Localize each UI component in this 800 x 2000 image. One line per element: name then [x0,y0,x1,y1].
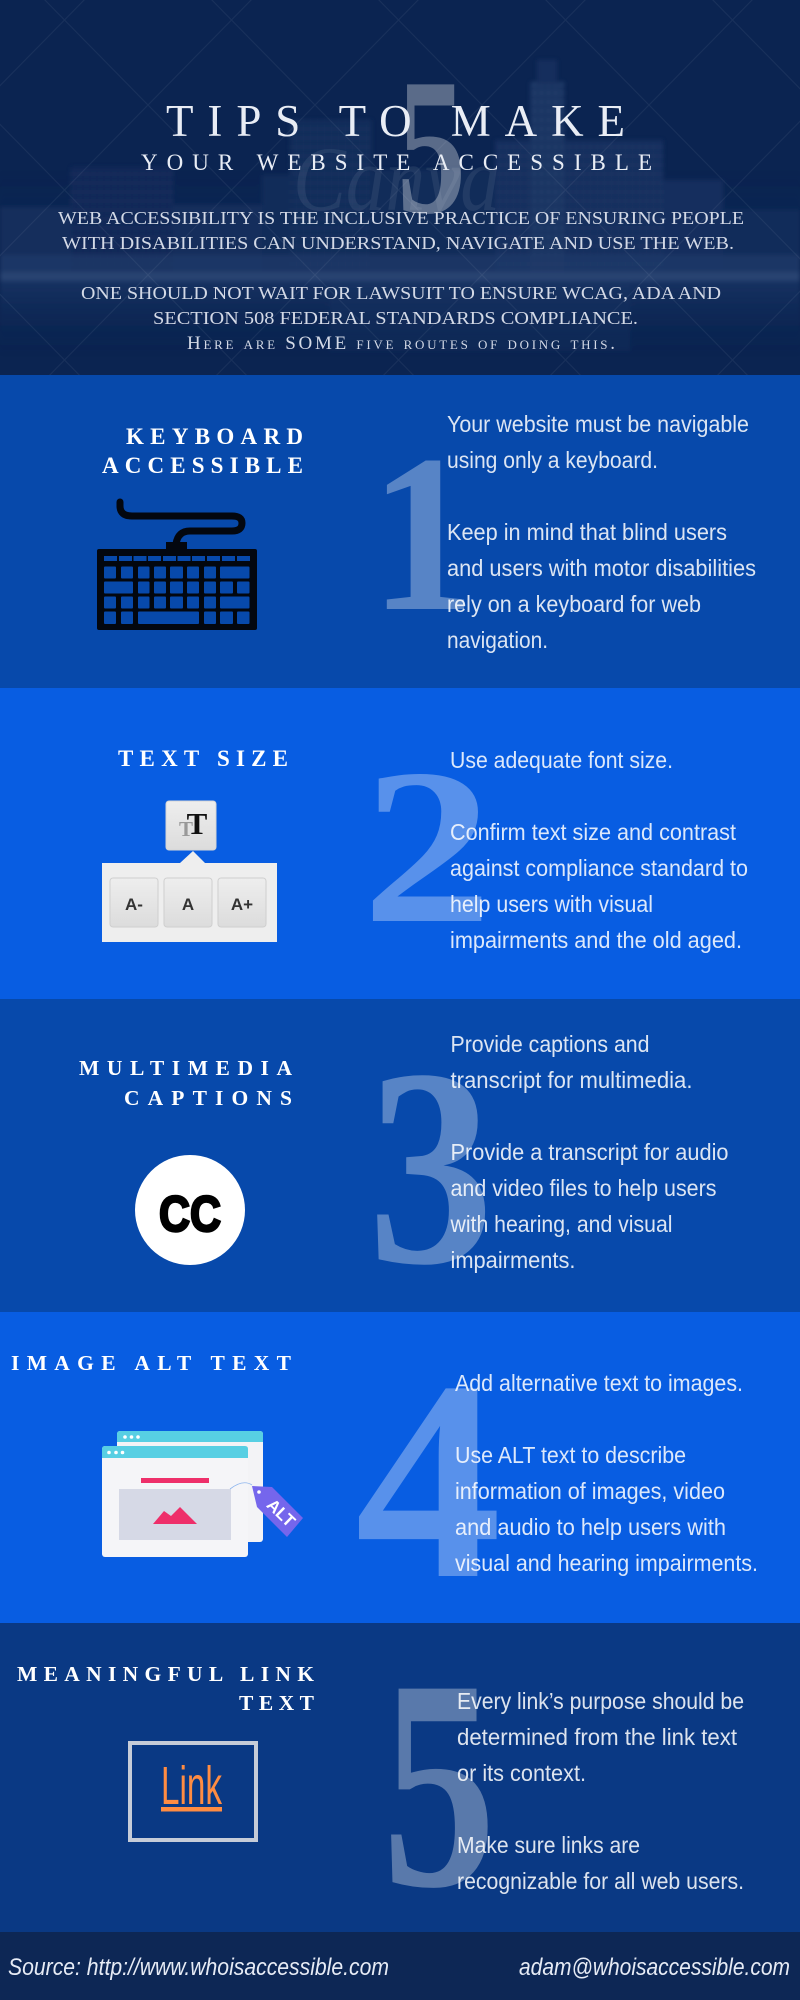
body text: rely on a keyboard for web [447,591,701,617]
big number 4: 4 [355,1322,502,1638]
body text: Confirm text size and contrast [450,819,737,845]
body text: against compliance standard to [450,855,748,881]
intro text: SECTION 508 FEDERAL STANDARDS COMPLIANCE. [153,308,638,328]
heading [17,1662,315,1715]
icon: closed captions [135,1155,245,1265]
panel: keyboard accessible [0,375,800,688]
body text: or its context. [457,1760,586,1786]
body text: Use ALT text to describe [455,1442,686,1468]
source text: Source: http://www.whoisaccessible.com [8,1954,389,1981]
intro text: ONE SHOULD NOT WAIT FOR LAWSUIT TO ENSURE WCAG, ADA AND [81,283,721,303]
body text: with hearing, and visual [450,1211,672,1237]
body text [455,1370,758,1576]
heading [79,1056,292,1110]
body text: recognizable for all web users. [457,1868,744,1894]
body text: and video files to help users [450,1175,716,1201]
body text [457,1688,744,1894]
panel: text size [0,688,800,999]
heading: TEXT SIZE [118,746,288,771]
intro text: WITH DISABILITIES CAN UNDERSTAND, NAVIGATE AND USE THE WEB. [62,233,734,253]
heading: TEXT [239,1691,315,1715]
body text: and users with motor disabilities [447,555,756,581]
body text: Provide a transcript for audio [450,1139,728,1165]
big number 5: 5 [397,38,466,255]
panel: footer [0,1932,800,2000]
heading: MULTIMEDIA [79,1056,292,1080]
heading: KEYBOARD [126,424,303,449]
intro text: WEB ACCESSIBILITY IS THE INCLUSIVE PRACTICE OF ENSURING PEOPLE [58,208,744,228]
body text: impairments and the old aged. [450,927,742,953]
intro text [58,208,744,354]
icon: link box: Link [161,1756,223,1816]
icon: link box [130,1743,256,1840]
icon: text size widget: A+ [231,895,253,914]
panel: image alt text [0,1312,800,1638]
big number 3: 3 [368,1011,494,1323]
panel: header [0,0,800,375]
body text: visual and hearing impairments. [455,1550,758,1576]
heading: IMAGE ALT TEXT [11,1351,292,1375]
body text: information of images, video [455,1478,725,1504]
body text [447,411,756,653]
icon: text size widget: T [187,806,208,841]
body text: Provide captions and [450,1031,650,1057]
intro text: Here are SOME five routes of doing this. [187,333,615,354]
body text [450,1031,728,1273]
heading: MEANINGFUL LINK [17,1662,314,1686]
heading: ACCESSIBLE [102,453,303,478]
subtitle: YOUR WEBSITE ACCESSIBLE [141,150,652,175]
icon: browser windows with alt tag: ALT [263,1495,299,1531]
heading: CAPTIONS [124,1086,292,1110]
body text: and audio to help users with [455,1514,726,1540]
icon: text size widget: A [182,895,194,914]
icon: browser windows with alt tag [102,1431,303,1557]
body text: Use adequate font size. [450,747,673,773]
title: TIPS TO MAKE [166,96,625,146]
body text: impairments. [450,1247,576,1273]
icon: closed captions: CC [159,1186,221,1242]
icon: keyboard [97,502,257,630]
panel: multimedia captions [0,999,800,1323]
city skyline background [0,60,800,356]
body text: navigation. [447,627,548,653]
body text [450,747,748,953]
body text: Add alternative text to images. [455,1370,743,1396]
body text: using only a keyboard. [447,447,658,473]
big number 1: 1 [370,409,475,659]
big number 5: 5 [382,1618,496,1950]
icon: text size widget [102,801,277,942]
heading [102,424,303,478]
body text: help users with visual [450,891,653,917]
watermark: Canva [293,128,500,230]
icon: text size widget: T [179,817,193,841]
body text: Make sure links are [457,1832,640,1858]
body text: determined from the link text [457,1724,738,1750]
icon: text size widget: A- [125,895,143,914]
body text: Your website must be navigable [447,411,749,437]
big number 2: 2 [362,724,492,970]
body text: Keep in mind that blind users [447,519,727,545]
panel: meaningful link text [0,1618,800,1950]
body text: Every link’s purpose should be [457,1688,744,1714]
body text: transcript for multimedia. [450,1067,692,1093]
